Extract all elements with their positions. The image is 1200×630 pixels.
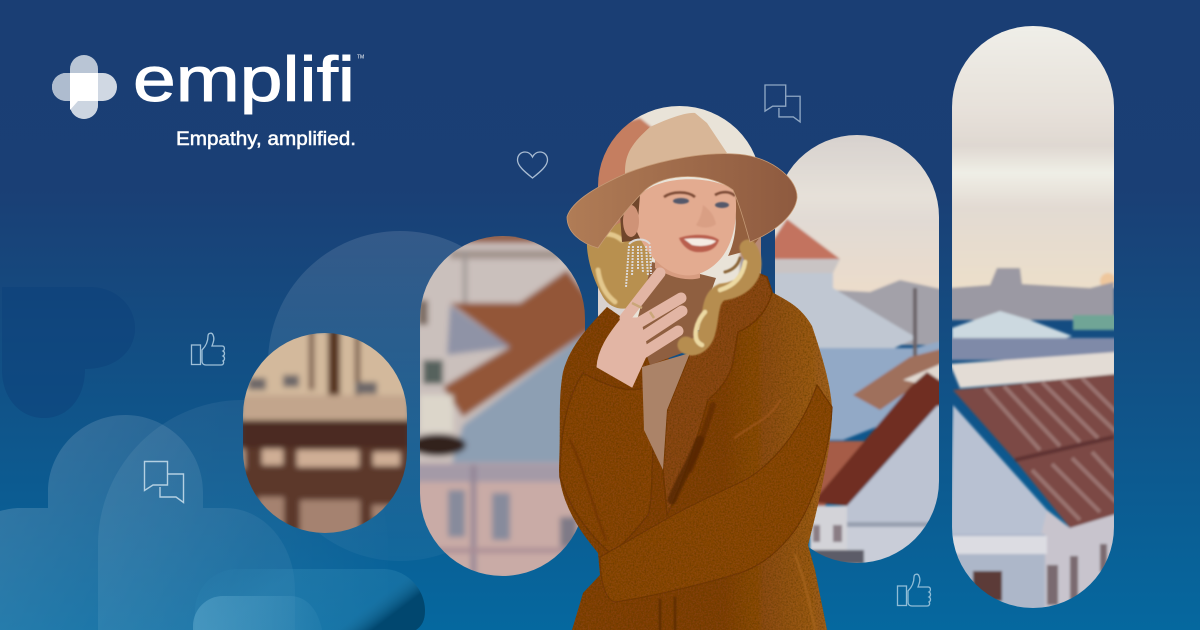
dark hair under brim [620, 188, 648, 242]
logo mark: cross with speech bubble [52, 55, 117, 119]
turtleneck [636, 262, 716, 365]
decorative bottom pill, dark edge [195, 569, 425, 630]
coat folds [570, 400, 815, 630]
trademark: TM [357, 54, 364, 60]
photo pill: pink house and roofs [420, 236, 585, 576]
tagline: Empathy, amplified. [176, 129, 356, 150]
icon: chat bubbles top [765, 85, 800, 122]
icon: thumbs up bottom right [898, 574, 930, 606]
logo wordmark: emplifi [133, 45, 355, 115]
sweater [642, 353, 690, 470]
photo pill: tower and rooftops [770, 130, 947, 570]
decorative heart shape, dark [2, 287, 135, 418]
nose [696, 205, 716, 228]
eyes and brows [664, 192, 735, 208]
photo pill: behind hat [598, 106, 761, 330]
icon: chat bubbles left [144, 462, 184, 502]
blonde curls [686, 248, 753, 347]
brim underside right [728, 186, 764, 256]
hair highlight left [590, 234, 622, 302]
decorative bottom pill, light [193, 596, 322, 630]
photo pill: skyline and tiled roof [950, 20, 1120, 612]
decorative large pill behind buildings [268, 231, 532, 561]
ear [623, 205, 639, 237]
coat left sleeve [560, 373, 653, 553]
logo [52, 45, 364, 150]
neck skin [655, 250, 700, 279]
hat crown [625, 113, 727, 178]
coat lapel and collar [663, 270, 772, 515]
decorative cloud shape [0, 415, 295, 630]
icon: heart [518, 152, 548, 178]
decorative pill behind cloud [98, 400, 388, 630]
hair back [587, 220, 655, 309]
hat brim [567, 154, 797, 248]
rings [632, 303, 654, 318]
hand [597, 273, 682, 387]
photo pill: balcony building [240, 330, 410, 540]
coat [559, 270, 832, 630]
woman in hat and teddy coat [559, 113, 832, 630]
icon: thumbs up left [192, 333, 224, 365]
earring [626, 240, 651, 287]
smile [679, 235, 719, 252]
coat forearm [600, 385, 832, 602]
face [637, 179, 736, 275]
